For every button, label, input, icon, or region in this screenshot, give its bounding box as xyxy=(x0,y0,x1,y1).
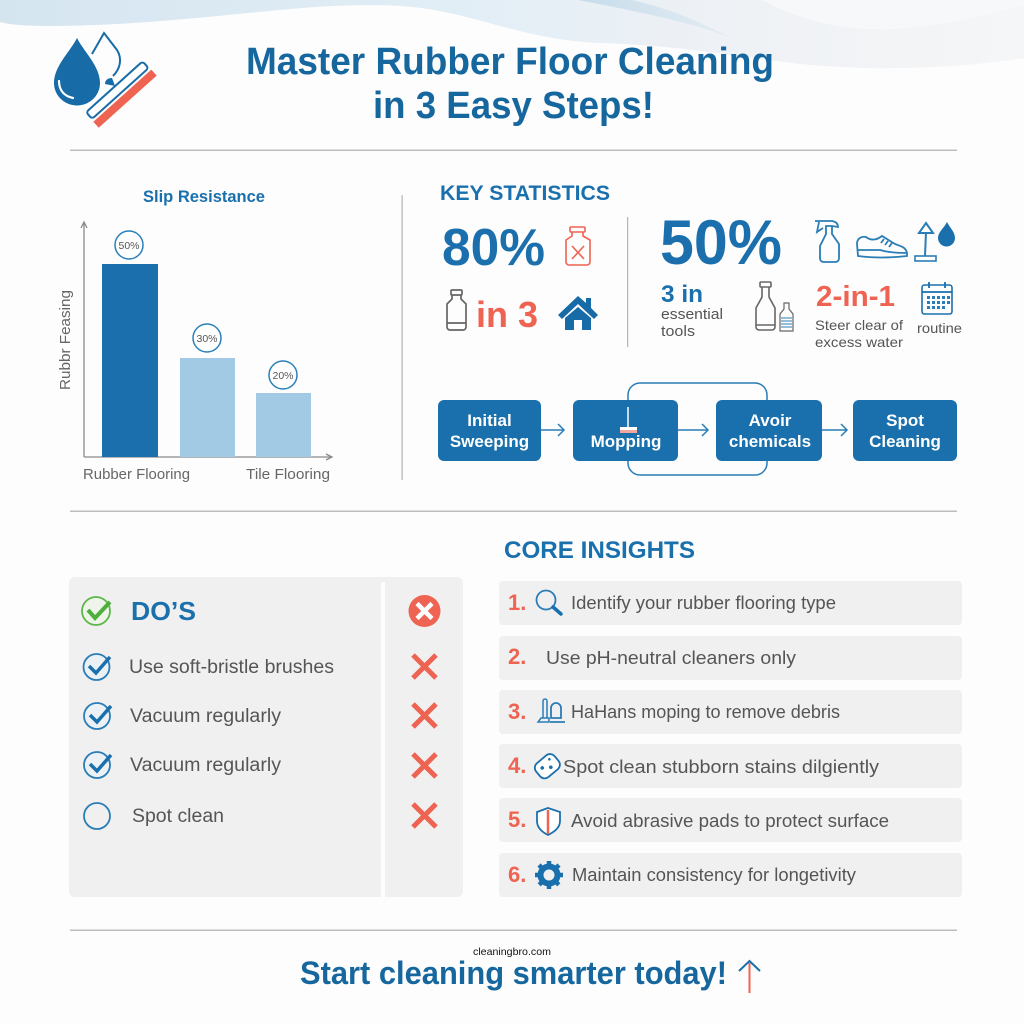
step: avoid chemicals: chemicals xyxy=(729,432,811,451)
panel: do's and don'ts xyxy=(69,577,463,897)
connector loops xyxy=(628,383,767,475)
insight 3: HaHans moping to remove debris xyxy=(571,702,840,722)
bar: tile 20%: 20% xyxy=(272,370,294,382)
insight 3 xyxy=(499,690,962,734)
stat 3 in essential tools: tools xyxy=(661,323,695,340)
icon: mop with arrow and drop xyxy=(915,222,955,261)
heading: CORE INSIGHTS xyxy=(504,537,695,564)
axes xyxy=(81,222,332,460)
step: mopping xyxy=(573,400,678,461)
icons: red crosses xyxy=(413,655,436,827)
bar: middle 30% xyxy=(180,324,235,457)
stat 3 in essential tools xyxy=(661,281,723,340)
step: spot cleaning xyxy=(853,400,957,461)
step: mopping: Mopping xyxy=(591,432,661,451)
source url: cleaningbro.com xyxy=(473,946,551,958)
insight 5: Avoid abrasive pads to protect surface xyxy=(571,811,889,831)
insight 1 xyxy=(499,581,962,625)
step: spot cleaning: Spot xyxy=(886,411,924,430)
insight 4 xyxy=(499,744,962,788)
caption: steer clear: Steer clear of xyxy=(815,317,903,333)
icon: calendar xyxy=(922,282,952,314)
item: vacuum: Vacuum regularly xyxy=(130,706,282,727)
x axis labels: Tile Flooring xyxy=(246,466,330,483)
insight 2: Use pH-neutral cleaners only xyxy=(546,648,796,668)
stat 3 in essential tools: essential xyxy=(661,306,723,323)
icon: shoe xyxy=(857,236,907,258)
item: vacuum xyxy=(84,703,282,729)
icon: red cross circle xyxy=(408,595,440,627)
stat 3 in essential tools: 3 in xyxy=(661,281,703,308)
stat 2-in-1: 2-in-1 xyxy=(816,281,895,313)
bar: rubber 50% xyxy=(102,231,158,457)
item: soft-bristle xyxy=(84,654,334,680)
insight 6: Maintain consistency for longetivity xyxy=(572,865,856,885)
heading: KEY STATISTICS xyxy=(440,182,610,205)
stat 50%: 50% xyxy=(660,208,782,278)
bar: rubber 50%: 50% xyxy=(118,240,140,252)
title xyxy=(246,41,774,127)
y axis label: Rubbr Feasing xyxy=(57,290,74,390)
insight 2: 2. xyxy=(508,644,526,669)
icon: water drops and squeegee logo xyxy=(54,33,157,128)
title: Master Rubber Floor Cleaning xyxy=(246,41,774,83)
item: vacuum: Vacuum regularly xyxy=(130,755,282,776)
item: soft-bristle: Use soft-bristle brushes xyxy=(129,657,334,678)
insight 3: 3. xyxy=(508,699,526,724)
step: spot cleaning: Cleaning xyxy=(869,432,941,451)
arrow xyxy=(822,424,847,436)
icon: house xyxy=(558,296,598,330)
bar: middle 30%: 30% xyxy=(196,333,218,345)
caption: steer clear: excess water xyxy=(815,334,903,350)
step: avoid chemicals: Avoir xyxy=(749,411,792,430)
x axis labels xyxy=(83,466,330,483)
insight 5 xyxy=(499,798,962,842)
insight 1: Identify your rubber flooring type xyxy=(571,593,836,613)
caption: routine: routine xyxy=(917,320,962,336)
insight 6: 6. xyxy=(508,862,526,887)
insight 2 xyxy=(499,636,962,680)
process flow xyxy=(438,383,957,475)
icon: two bottles xyxy=(756,282,793,331)
arrow xyxy=(678,424,708,436)
item: spot clean: Spot clean xyxy=(132,806,224,827)
icon: green check xyxy=(82,597,110,625)
insight 4: Spot clean stubborn stains dilgiently xyxy=(563,756,880,777)
step: initial sweeping: Sweeping xyxy=(450,432,529,451)
stat in 3: in 3 xyxy=(476,294,538,335)
caption: steer clear xyxy=(815,317,903,350)
key statistics xyxy=(440,182,962,350)
chart title: Slip Resistance xyxy=(143,188,265,206)
arrow xyxy=(541,424,564,436)
insight 4: 4. xyxy=(508,753,526,778)
bar chart: slip resistance xyxy=(57,188,332,483)
icon: up arrow xyxy=(739,961,760,993)
footer call to action: Start cleaning smarter today! xyxy=(300,955,727,991)
insight 6 xyxy=(499,853,962,897)
title: in 3 Easy Steps! xyxy=(373,85,654,127)
stat 80%: 80% xyxy=(442,219,545,277)
item: spot clean xyxy=(84,803,224,829)
icon: spray bottle xyxy=(815,221,839,262)
item: vacuum xyxy=(84,752,282,778)
x axis labels: Rubber Flooring xyxy=(83,466,190,483)
heading: do's: DO’S xyxy=(131,596,196,626)
bar: tile 20% xyxy=(256,361,311,457)
step: initial sweeping xyxy=(438,400,541,461)
step: initial sweeping: Initial xyxy=(467,411,512,430)
header wave background xyxy=(0,0,1024,68)
core insights xyxy=(499,537,962,897)
icon: grey bottle xyxy=(447,290,466,330)
insight 1: 1. xyxy=(508,590,526,615)
icon: chemical bottle crossed xyxy=(566,227,590,265)
step: avoid chemicals xyxy=(716,400,822,461)
insight 5: 5. xyxy=(508,807,526,832)
